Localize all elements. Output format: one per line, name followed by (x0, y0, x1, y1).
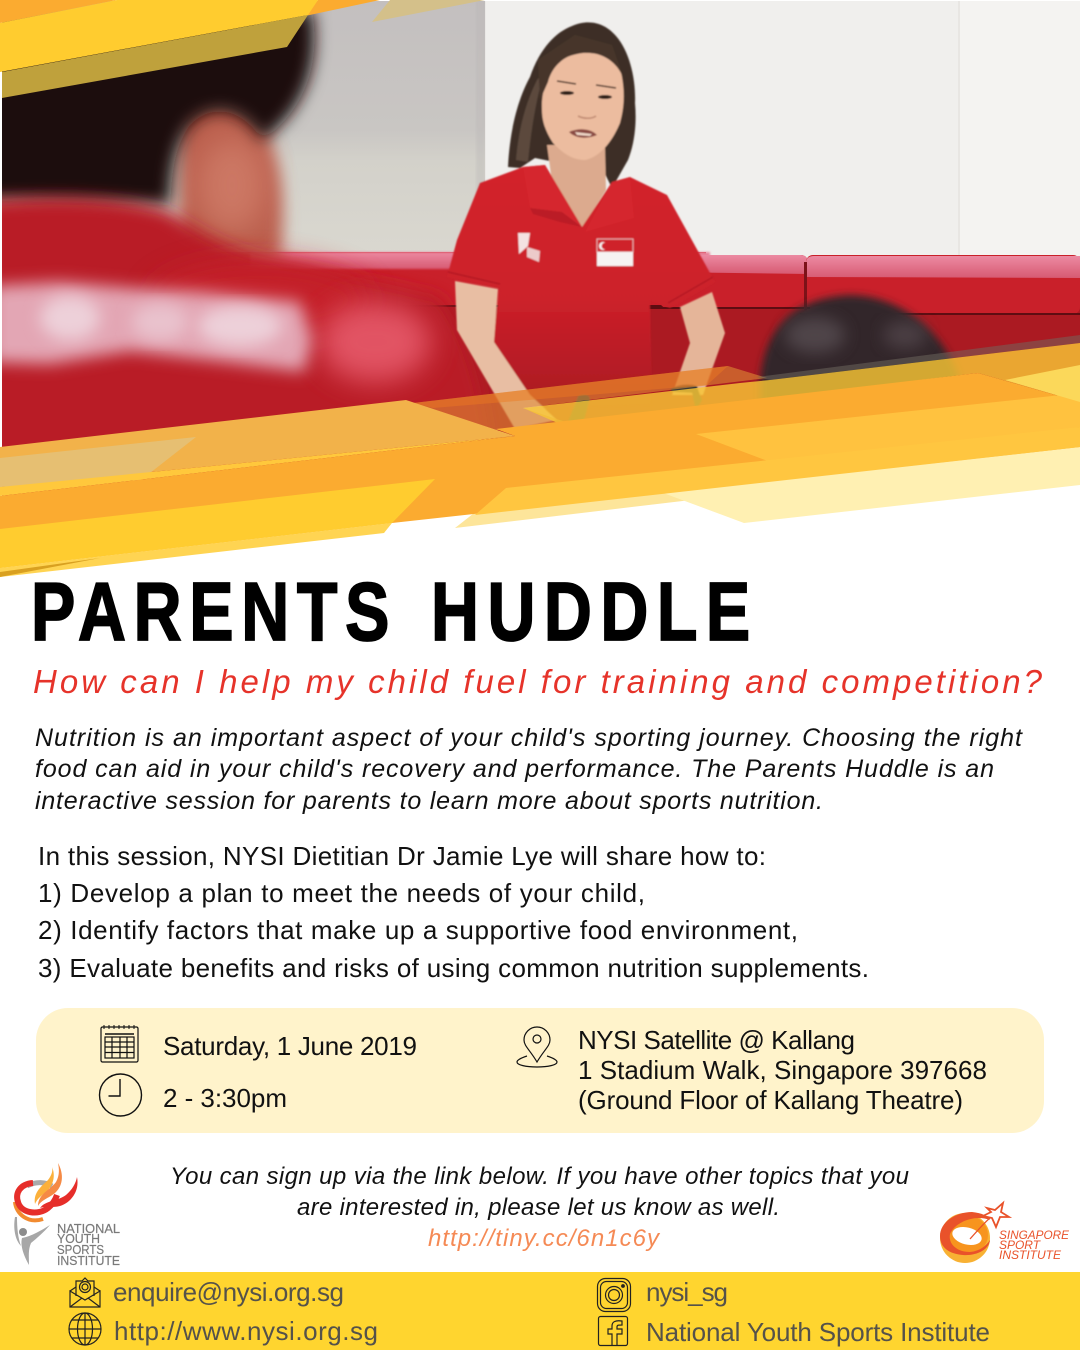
icon: location pin (517, 1027, 557, 1067)
session outcomes list: 1) Develop a plan to meet the needs of your child, (38, 878, 645, 908)
logo wordmark: SPORTS (57, 1242, 104, 1257)
neck (547, 145, 606, 228)
sofa (240, 250, 1080, 460)
eyes (560, 91, 574, 95)
venue address (578, 1025, 987, 1115)
website: http://www.nysi.org.sg (114, 1316, 378, 1346)
icon: facebook (598, 1316, 628, 1346)
logo: National Youth Sports Institute (14, 1163, 120, 1268)
icon: globe (69, 1313, 101, 1345)
title: PARENTS (31, 565, 389, 658)
logo wordmark: INSTITUTE (999, 1248, 1062, 1262)
logo wordmark: SINGAPORE (999, 1228, 1070, 1242)
panel background (36, 1008, 1044, 1133)
sign up message: http://tiny.cc/6n1c6y (428, 1225, 661, 1252)
logo athlete figure (14, 1217, 50, 1265)
logo wordmark (999, 1228, 1070, 1262)
icon: instagram (598, 1278, 630, 1312)
face (542, 53, 624, 160)
icon: clock (100, 1074, 142, 1116)
logo wordmark (57, 1221, 120, 1268)
icon: calendar (101, 1025, 138, 1062)
logo: Singapore Sport Institute (940, 1203, 1070, 1263)
panel: event details (36, 1008, 1044, 1133)
subtitle question: How can I help my child fuel for training and competition? (33, 663, 1043, 700)
logo wordmark: SPORT (999, 1238, 1042, 1252)
photo wall background (2, 1, 1080, 258)
sign up message: You can sign up via the link below. If you have other topics that you (170, 1163, 909, 1190)
blurred foreground head, right (754, 288, 960, 398)
email address: enquire@nysi.org.sg (113, 1277, 344, 1307)
blurred shirt lettering (0, 282, 312, 372)
shirt emblem (518, 233, 530, 254)
shirt (447, 165, 715, 410)
icon: email (70, 1278, 100, 1307)
venue address: NYSI Satellite @ Kallang (578, 1025, 855, 1055)
right arm (672, 292, 725, 395)
fringe hair (538, 36, 622, 94)
logo wordmark: YOUTH (57, 1231, 100, 1246)
session outcomes list: 2) Identify factors that make up a supportive food environment, (38, 915, 798, 945)
sign up message (170, 1163, 909, 1252)
nose and mouth (578, 116, 596, 118)
title: HUDDLE (431, 565, 750, 658)
logo ring and star (940, 1203, 1009, 1263)
intro paragraph: Nutrition is an important aspect of your child's sporting journey. Choosing the right (35, 724, 1023, 752)
left arm (455, 281, 557, 429)
neck and ear (180, 99, 282, 262)
intro paragraph: food can aid in your child's recovery and performance. The Parents Huddle is an (35, 755, 994, 783)
venue address: (Ground Floor of Kallang Theatre) (578, 1085, 963, 1115)
hair (0, 10, 314, 205)
session outcomes list: In this session, NYSI Dietitian Dr Jamie Lye will share how to: (38, 841, 766, 871)
wrist strap (568, 395, 590, 422)
session outcomes list (38, 841, 869, 983)
intro paragraph (35, 724, 1023, 815)
intro paragraph: interactive session for parents to learn more about sports nutrition. (35, 787, 823, 815)
blurred foreground parent (2, 9, 480, 446)
hair back (508, 22, 636, 188)
date: Saturday, 1 June 2019 (163, 1031, 417, 1061)
flag badge (597, 239, 633, 266)
yellow ribbon graphic, top left (0, 0, 485, 98)
footer contact bar (0, 1272, 1080, 1350)
dietitian figure (447, 22, 725, 429)
session outcomes list: 3) Evaluate benefits and risks of using common nutrition supplements. (38, 953, 869, 983)
instagram handle: nysi_sg (646, 1277, 728, 1307)
venue address: 1 Stadium Walk, Singapore 397668 (578, 1055, 987, 1085)
facebook page: National Youth Sports Institute (646, 1317, 990, 1347)
title (31, 565, 750, 658)
sign up message: are interested in, please let us know as well. (297, 1194, 780, 1221)
orange and yellow ribbon graphic, lower banner (0, 335, 1080, 577)
logo wordmark: INSTITUTE (57, 1253, 120, 1268)
shirt highlight (319, 302, 431, 382)
footer background (0, 1272, 1080, 1350)
shirt back (2, 184, 480, 446)
hero photo: dietitian speaking to parents (0, 0, 1080, 520)
logo flame ring (15, 1163, 78, 1220)
logo wordmark: NATIONAL (57, 1221, 120, 1236)
time: 2 - 3:30pm (163, 1083, 287, 1113)
watch (670, 384, 702, 410)
